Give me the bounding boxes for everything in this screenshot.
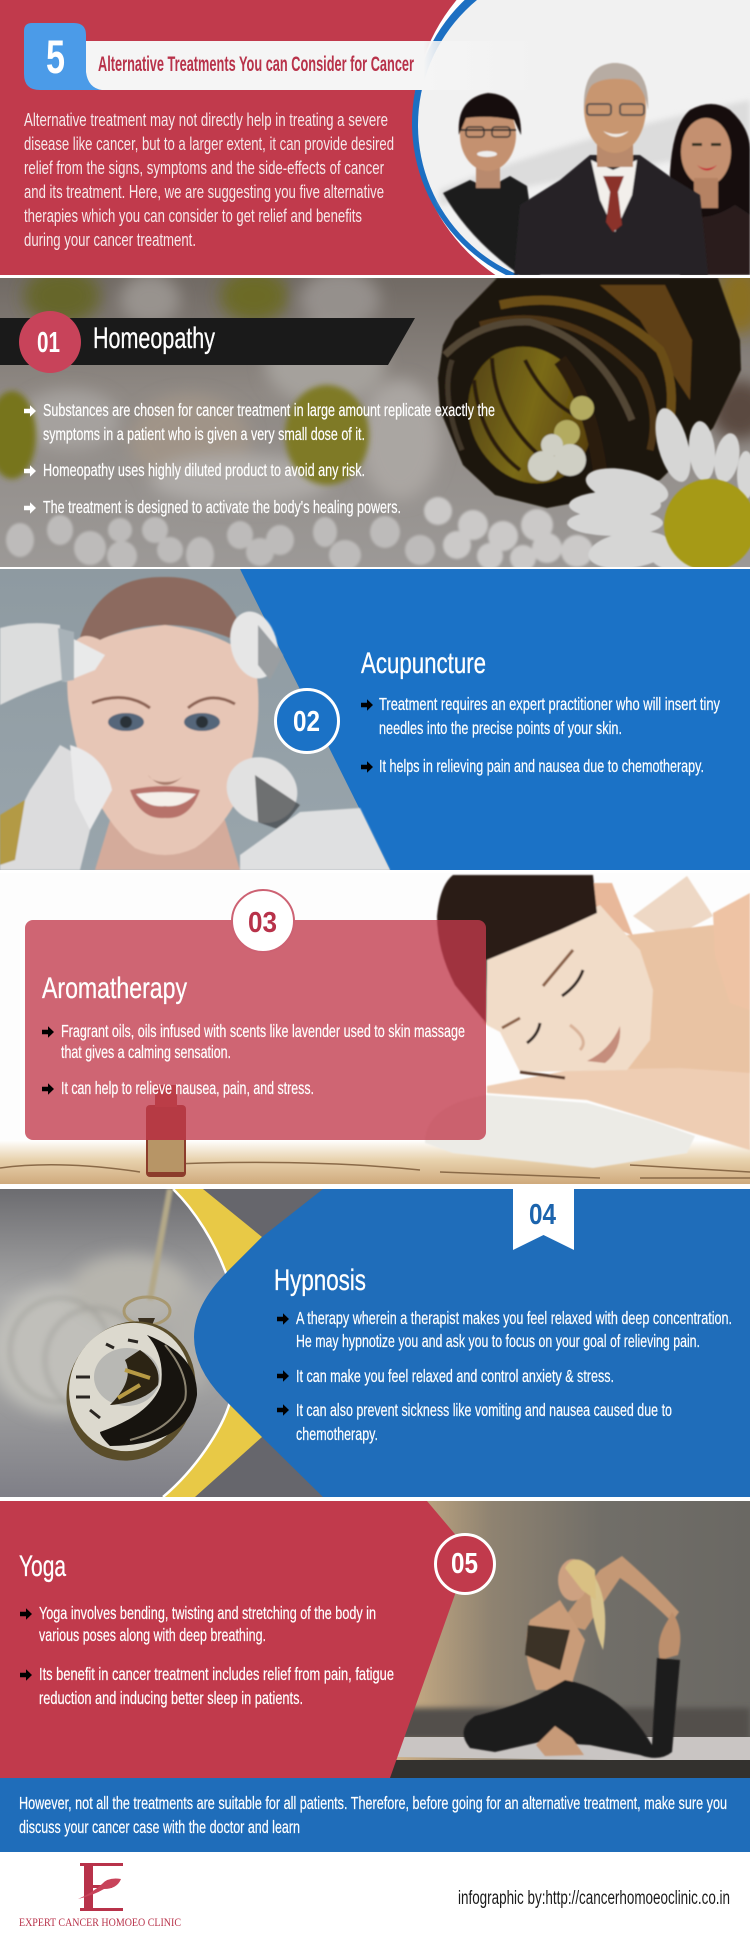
bullet list: Fragrant oils, oils infused with scents like lavender used to skin massage xyxy=(61,1021,465,1041)
logo: Expert Cancer Homoeo Clinic xyxy=(19,1863,181,1929)
bullet list xyxy=(20,1603,394,1708)
title banner xyxy=(86,41,536,90)
intro text: during your cancer treatment. xyxy=(24,229,196,250)
bullet list: symptoms in a patient who is given a very small dose of it. xyxy=(43,424,365,444)
heading: Aromatherapy: Aromatherapy xyxy=(42,972,187,1005)
number badge: 03: 03 xyxy=(248,907,277,939)
panel: hypnosis xyxy=(0,1189,750,1497)
number badge: 05 xyxy=(436,1534,494,1594)
number badge: 5 xyxy=(24,23,102,90)
photo: doctors team xyxy=(412,0,750,275)
intro text xyxy=(24,109,394,250)
bullet list: that gives a calming sensation. xyxy=(61,1042,231,1062)
number badge: 01: 01 xyxy=(37,327,60,359)
heading bar: Homeopathy xyxy=(93,322,215,355)
photo: daisies, pills and bottle xyxy=(0,266,750,574)
panel: header xyxy=(0,0,750,275)
intro text: disease like cancer, but to a larger extent, it can provide desired xyxy=(24,133,394,154)
bullet list xyxy=(361,694,720,776)
bullet list: Substances are chosen for cancer treatment in large amount replicate exactly the xyxy=(43,400,495,420)
panel: aromatherapy xyxy=(0,873,750,1184)
photo: massage xyxy=(0,873,750,1184)
blue curve edge xyxy=(194,1189,750,1497)
bullet list: chemotherapy. xyxy=(296,1424,378,1444)
photo: woman with devices xyxy=(0,569,390,870)
panel: acupuncture xyxy=(0,569,750,870)
number badge: 5: 5 xyxy=(46,30,65,83)
content card xyxy=(25,920,486,1140)
photo: yoga pose xyxy=(380,1501,750,1778)
bullet list: needles into the precise points of your skin. xyxy=(379,718,622,738)
bullet list xyxy=(42,1021,465,1098)
intro text: and its treatment. Here, we are suggesting you five alternative xyxy=(24,181,384,202)
intro text: therapies which you can consider to get relief and benefits xyxy=(24,205,362,226)
bullet list: Yoga involves bending, twisting and stretching of the body in xyxy=(39,1603,376,1623)
bullet list: Its benefit in cancer treatment includes relief from pain, fatigue xyxy=(39,1664,394,1684)
photo: pocket watch xyxy=(0,1189,340,1497)
bullet list xyxy=(24,400,495,517)
bullet list: It can make you feel relaxed and control anxiety & stress. xyxy=(296,1366,614,1386)
number badge: 05: 05 xyxy=(451,1548,478,1580)
panel: homeopathy xyxy=(0,266,750,574)
number badge: 01 xyxy=(19,311,81,373)
title banner: Alternative Treatments You can Consider for Cancer xyxy=(98,53,414,76)
panel: closing note: discuss your cancer case with the doctor and learn xyxy=(19,1817,300,1837)
bullet list: It can help to relieve nausea, pain, and stress. xyxy=(61,1078,314,1098)
heading: Yoga: Yoga xyxy=(19,1550,66,1583)
number badge: 02 xyxy=(276,690,338,752)
bullet list xyxy=(277,1308,732,1444)
bullet list: The treatment is designed to activate the body's healing powers. xyxy=(43,497,401,517)
logo: Expert Cancer Homoeo Clinic: EXPERT CANCER HOMOEO CLINIC xyxy=(19,1915,181,1929)
bullet list: reduction and inducing better sleep in patients. xyxy=(39,1688,303,1708)
panel: yoga xyxy=(0,1501,750,1778)
intro text: relief from the signs, symptoms and the side-effects of cancer xyxy=(24,157,384,178)
number badge: 02: 02 xyxy=(293,706,320,738)
heading: Acupuncture: Acupuncture xyxy=(361,647,486,680)
panel: closing note xyxy=(0,1778,750,1852)
bullet list: various poses along with deep breathing. xyxy=(39,1625,266,1645)
heading bar xyxy=(0,318,415,365)
ribbon number badge: 04: 04 xyxy=(529,1199,556,1231)
number badge: 03 xyxy=(232,890,294,952)
heading: Hypnosis: Hypnosis xyxy=(274,1264,366,1297)
ribbon number badge: 04 xyxy=(513,1189,574,1250)
intro text: Alternative treatment may not directly help in treating a severe xyxy=(24,109,388,130)
bullet list: Homeopathy uses highly diluted product to avoid any risk. xyxy=(43,460,365,480)
